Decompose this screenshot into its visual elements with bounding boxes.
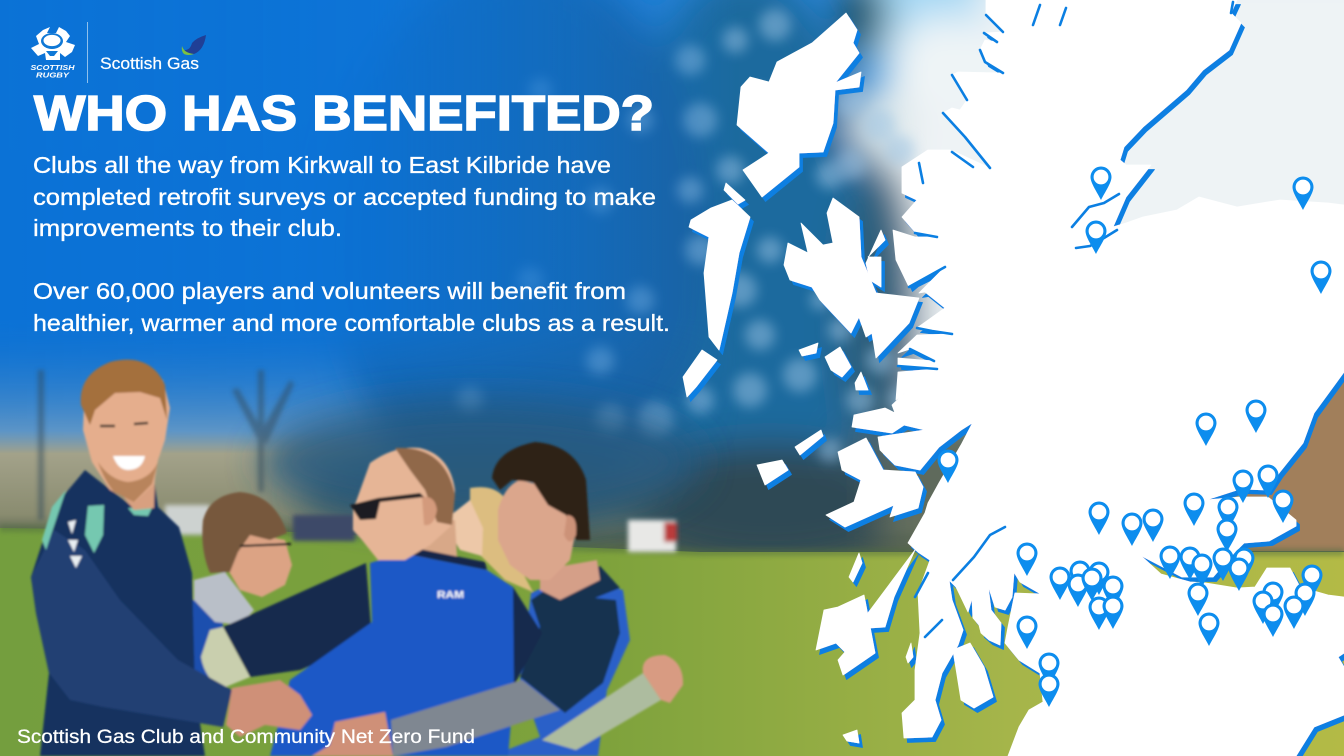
title: WHO HAS BENEFITED? (34, 87, 654, 141)
text block: club surveys: Clubs all the way from Kirkwall to East Kilbride have (33, 152, 611, 178)
pin (1102, 596, 1124, 629)
Lewis and Harris (737, 13, 861, 197)
pin (1070, 560, 1090, 594)
pin (1038, 674, 1060, 707)
pin (1122, 512, 1142, 546)
text block: beneficiaries: healthier, warmer and more comfortable clubs as a result. (33, 310, 670, 336)
Small Isles (825, 347, 851, 377)
logo: Scottish Rugby thistle crest: SCOTTISH (30, 65, 76, 72)
logo: Scottish Rugby thistle crest: RUGBY (36, 72, 71, 80)
pin (1218, 496, 1238, 530)
pin (1196, 412, 1216, 446)
pin (1068, 574, 1088, 607)
player: man in glasses (192, 492, 292, 680)
pin (1016, 542, 1038, 576)
pin (1050, 566, 1070, 600)
pin (1292, 176, 1314, 210)
pin (1228, 558, 1250, 591)
footer caption: Scottish Gas Club and Community Net Zero Fund (17, 726, 475, 748)
pin (1160, 546, 1180, 579)
blue brand overlay (0, 0, 710, 445)
grassy field (0, 528, 1344, 756)
Barra (683, 350, 717, 397)
pin (1192, 554, 1212, 587)
Gigha (906, 643, 913, 663)
logo: Scottish Gas (100, 35, 206, 73)
map of Scotland with location pins (683, 0, 1344, 756)
map landmass and islands (683, 0, 1344, 756)
Jura (868, 550, 915, 628)
pin (1142, 508, 1164, 542)
location pins (938, 166, 1332, 707)
player: man smiling in navy jacket (31, 360, 232, 756)
mainland (852, 0, 1344, 756)
pin (1180, 546, 1200, 580)
Islay (816, 595, 875, 675)
logos (30, 22, 206, 83)
Skye (784, 198, 919, 358)
player: blonde woman (451, 487, 533, 592)
brown hillside (1240, 375, 1344, 551)
pin (1262, 582, 1284, 615)
pin (938, 450, 958, 483)
text block: club surveys: completed retrofit surveys or accepted funding to make (33, 184, 656, 210)
pin (1234, 548, 1254, 581)
pin (1252, 590, 1274, 624)
pin (1212, 548, 1234, 581)
Arran (953, 643, 993, 708)
pin (1088, 562, 1110, 595)
pin (1310, 260, 1332, 294)
pin (1184, 492, 1204, 526)
pin (1302, 564, 1322, 598)
pin (1216, 518, 1238, 552)
Ailsa and Sanda (843, 730, 859, 743)
text block: beneficiaries: Over 60,000 players and volunteers will benefit from (33, 278, 626, 304)
photo: group of rugby players (31, 360, 683, 756)
pin (1258, 464, 1278, 498)
pin (1262, 604, 1284, 637)
Mull (826, 438, 923, 527)
pin (1294, 582, 1316, 616)
pin (1082, 568, 1102, 601)
logo: Scottish Rugby thistle crest (30, 27, 76, 80)
pin (1088, 502, 1110, 535)
text block: beneficiaries (33, 278, 670, 336)
arms in huddle (226, 655, 683, 756)
pin (1284, 596, 1304, 629)
text block: club surveys: improvements to their club. (33, 215, 342, 241)
pin (1188, 582, 1208, 616)
pin (1086, 220, 1106, 254)
Uists (689, 200, 750, 350)
pin (1088, 596, 1110, 630)
pin (1232, 470, 1254, 503)
Coll and Tiree (795, 430, 823, 455)
Colonsay (849, 553, 862, 582)
pin (1102, 576, 1124, 609)
pin (1090, 166, 1112, 200)
pin (1038, 652, 1060, 686)
player: man with dark hair, blue bib (491, 442, 630, 756)
pin (1016, 616, 1038, 649)
text block: club surveys (33, 152, 656, 241)
Raasay (866, 230, 885, 287)
pin (1246, 400, 1266, 433)
logo: Scottish Gas: Scottish Gas (100, 54, 199, 73)
logo divider (87, 22, 88, 83)
player: man with sunglasses, blue bib (201, 448, 542, 756)
dark blurred treeline (260, 400, 700, 524)
RAM logo on bib: RAM (437, 590, 464, 601)
pin (1198, 612, 1220, 646)
pin (1272, 490, 1294, 523)
sea lochs and firths (898, 2, 1233, 637)
